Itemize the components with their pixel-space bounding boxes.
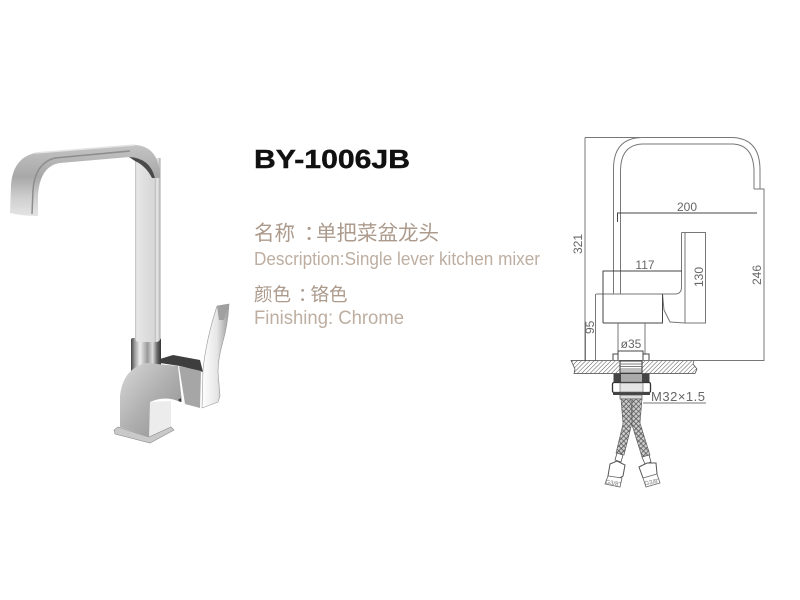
drawing: body outline — [603, 294, 662, 323]
dimension 117 — [603, 258, 682, 323]
faucet handle block — [179, 366, 201, 408]
dimension diameter 35: ø35 — [621, 337, 642, 351]
faucet spout — [10, 145, 160, 216]
right hose: G3/8" — [644, 478, 660, 487]
title: BY-1006JB — [254, 144, 410, 174]
dimension 117: 117 — [635, 258, 655, 272]
faucet column — [135, 158, 160, 342]
finishing Chinese: ： — [298, 284, 317, 305]
dimension 130: 130 — [692, 267, 706, 287]
product name Chinese: 名称 — [254, 222, 295, 245]
left hose — [605, 399, 632, 488]
faucet arched body — [120, 363, 182, 437]
right hose — [632, 399, 660, 487]
finishing Chinese: 颜色 — [254, 284, 291, 305]
dimension 321: 321 — [571, 234, 585, 254]
drawing: spout outline — [614, 138, 764, 361]
drawing: handle outline — [596, 232, 706, 323]
finishing Chinese: 铬色 — [310, 284, 348, 305]
faucet collar — [131, 338, 161, 372]
dimension 200 — [618, 200, 757, 222]
left hose: G3/8" — [605, 480, 621, 488]
faucet lever — [202, 304, 229, 408]
drawing: flange — [613, 351, 649, 361]
drawing: neck — [618, 323, 645, 354]
product name Chinese: 单把菜盆龙头 — [316, 222, 439, 245]
faucet dark top — [160, 355, 203, 372]
drawing: threaded shank — [620, 361, 642, 373]
description English: Description:Single lever kitchen mixer — [254, 249, 540, 269]
faucet photo — [10, 145, 229, 443]
drawing: mounting nut — [612, 374, 650, 399]
faucet base plate — [114, 427, 174, 443]
dimension 95 — [583, 294, 597, 361]
faucet mount and leg — [149, 401, 171, 438]
product name Chinese: ： — [304, 222, 324, 245]
dimension 95: 95 — [583, 320, 597, 334]
drawing: counter top line — [596, 360, 764, 362]
dimension 246: 246 — [750, 265, 764, 285]
dimension 321 — [571, 138, 640, 361]
M32 callout: M32×1.5 — [651, 389, 705, 404]
technical drawing — [571, 138, 764, 488]
finishing English: Finishing: Chrome — [254, 308, 404, 329]
dimension 200: 200 — [677, 200, 697, 214]
drawing: hatched counter — [571, 360, 697, 374]
